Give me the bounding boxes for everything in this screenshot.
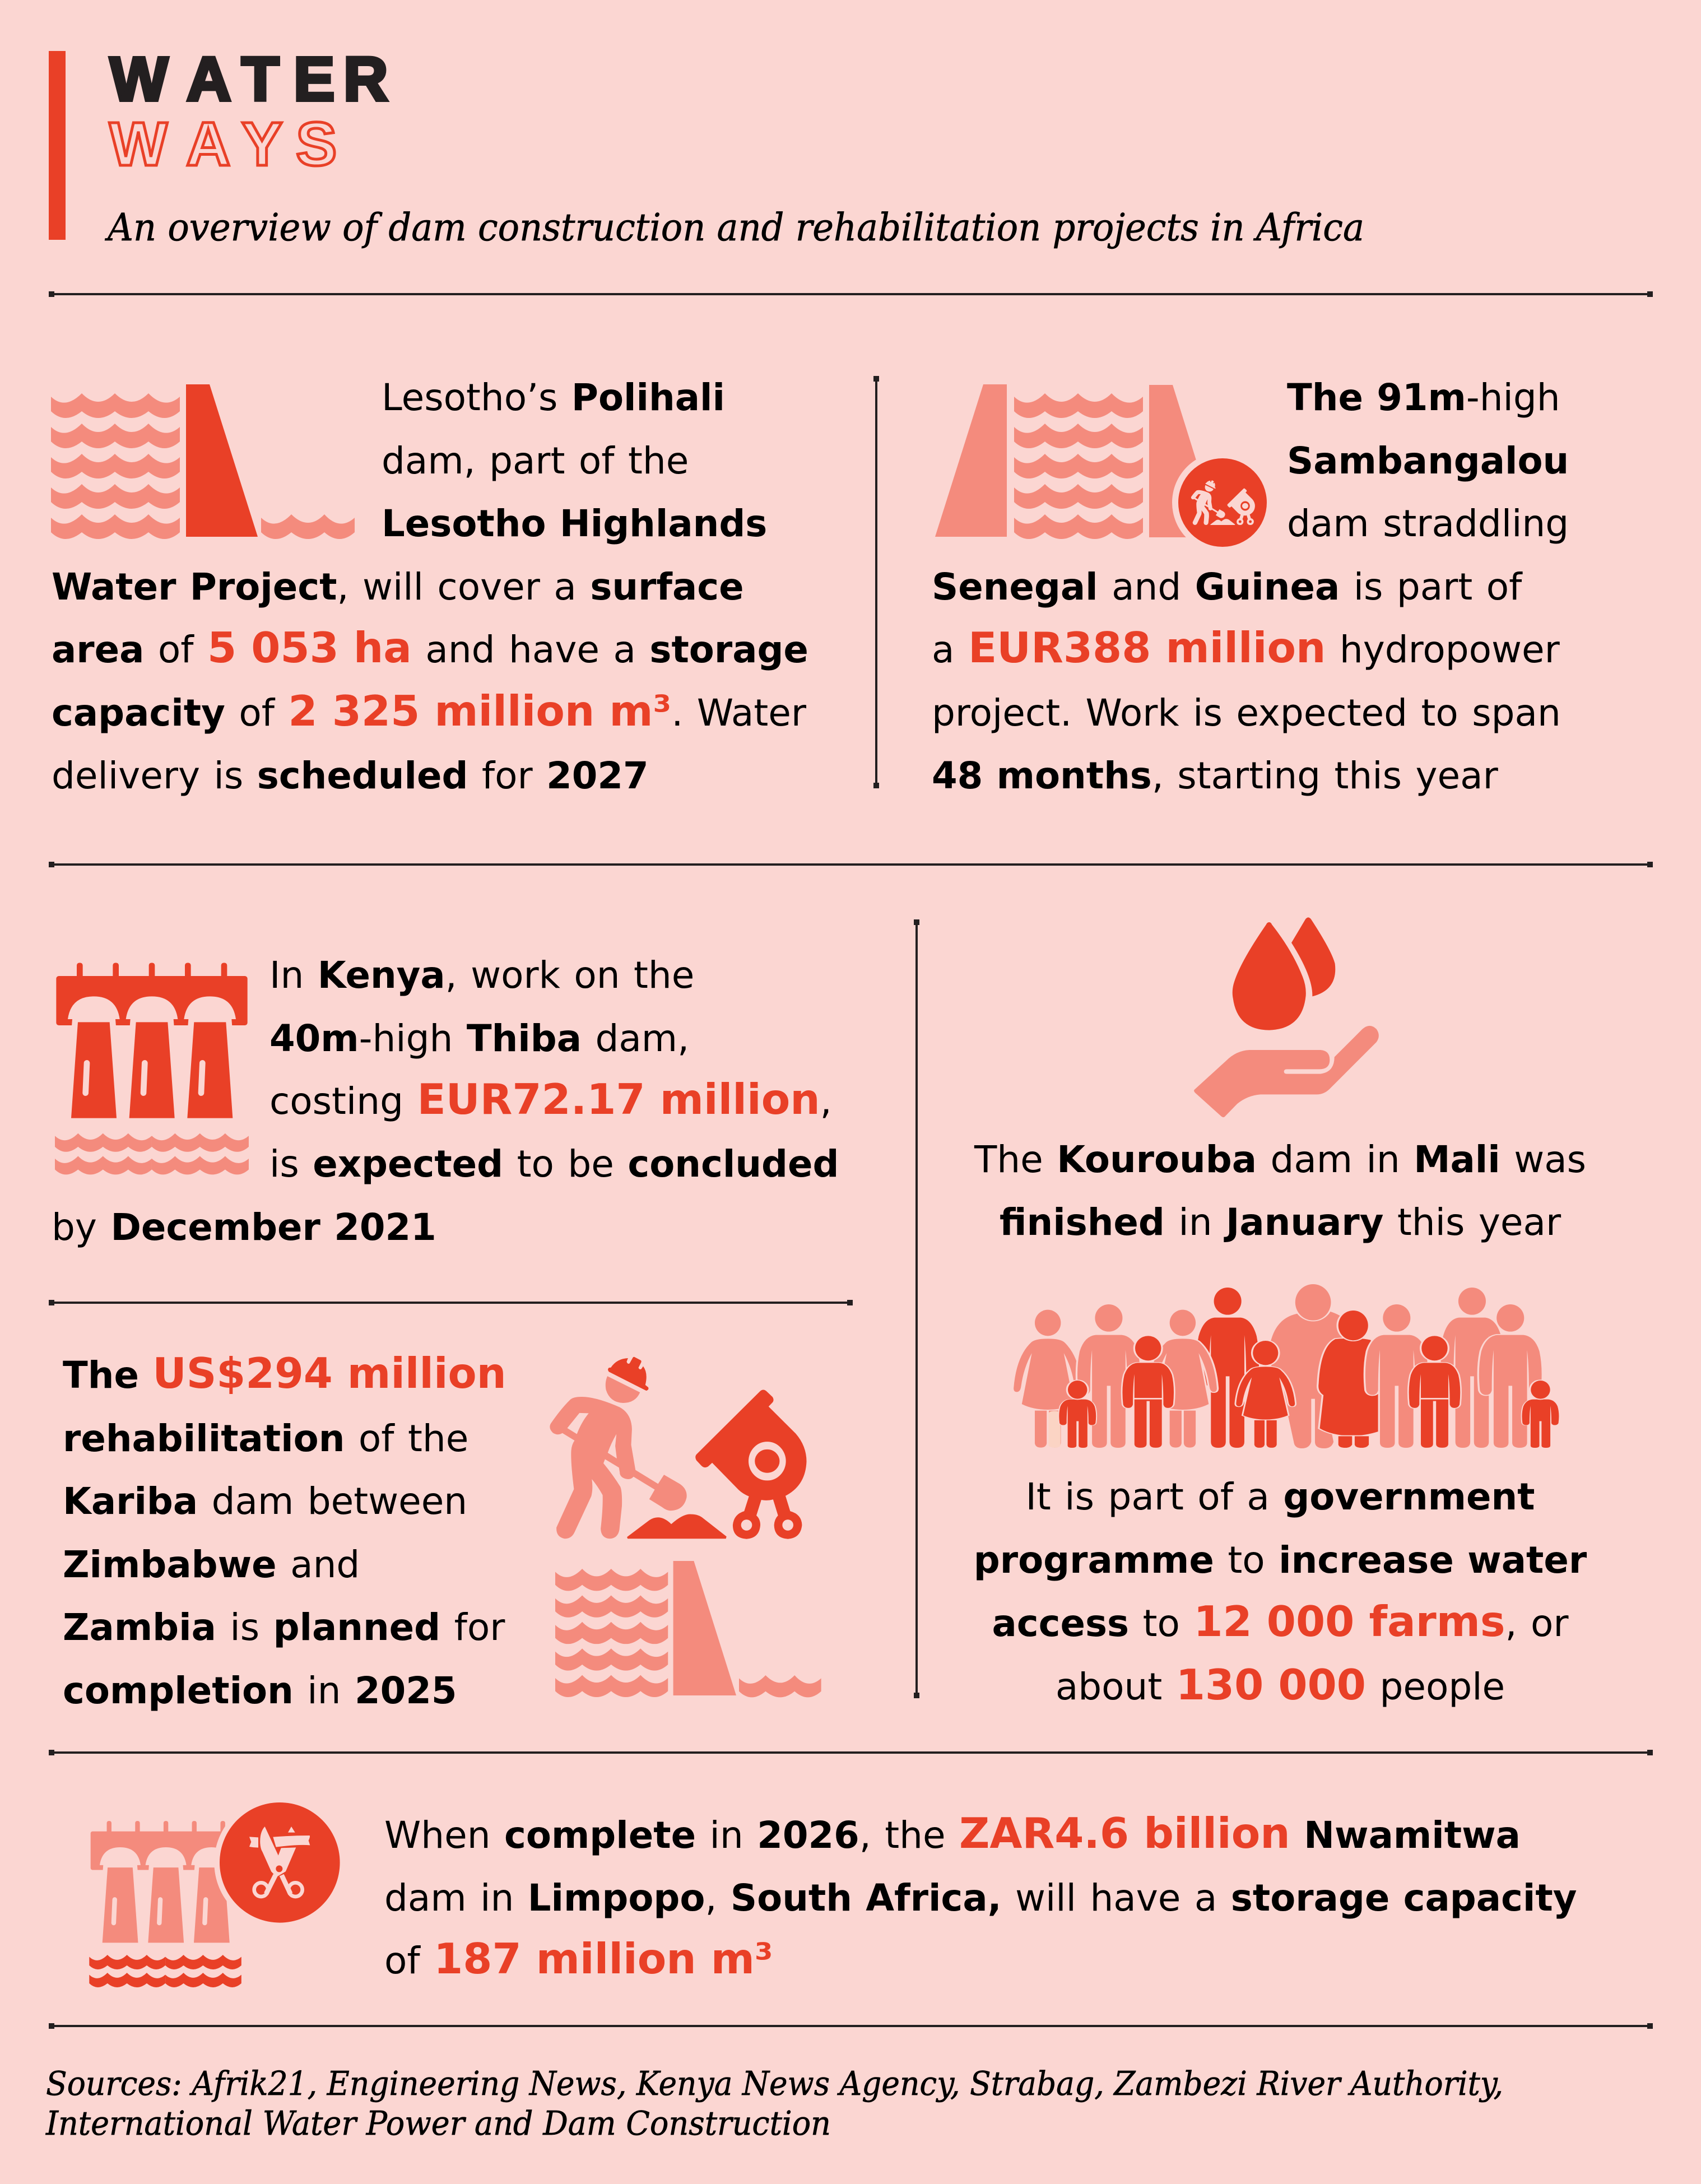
title: WAYS outline: WAYS <box>109 110 337 179</box>
title accent bar <box>49 51 66 240</box>
text: Kariba dam <box>63 1349 506 1712</box>
text: Thiba dam: costing EUR72.17 million, <box>269 1075 832 1124</box>
title: WATER: WATER <box>110 45 388 114</box>
text: Polihali dam: delivery is scheduled for 2027 <box>52 754 649 797</box>
text: Polihali dam: Water Project, will cover a surface <box>52 565 744 608</box>
text: Thiba dam: 40m-high Thiba dam, <box>269 1017 689 1060</box>
text: Polihali dam: Lesotho Highlands <box>382 503 767 545</box>
text: Polihali dam: area of 5 053 ha and have a storage <box>52 623 808 672</box>
text: Kourouba dam: finished in January this year <box>1000 1201 1561 1244</box>
text: Kariba dam: completion in 2025 <box>63 1669 457 1712</box>
text: Sambangalou dam: dam straddling <box>1287 502 1569 545</box>
sources: Sources: Afrik21, Engineering News, Kenya News Agency, Strabag, Zambezi River Authority, <box>46 2064 1503 2103</box>
text: Kariba dam: Kariba dam between <box>63 1480 467 1523</box>
icon: Thiba dam arches <box>55 963 249 1174</box>
icon: Nwamitwa dam with ribbon-cutting badge <box>89 1797 345 1987</box>
text: Kariba dam: rehabilitation of the <box>63 1417 468 1460</box>
text: Kariba dam: Zambia is planned for <box>63 1606 505 1649</box>
icon: scissors and ribbon <box>249 1827 310 1897</box>
text: Kariba dam: Zimbabwe and <box>63 1543 360 1586</box>
text: Kariba dam: The US$294 million <box>63 1349 506 1398</box>
icon: Polihali dam and water <box>51 384 355 539</box>
text: Kourouba dam: The Kourouba dam in Mali was <box>974 1138 1586 1181</box>
text: Sambangalou dam: a EUR388 million hydropower <box>932 623 1560 672</box>
text: Sambangalou dam: Senegal and Guinea is part of <box>932 565 1523 608</box>
text: Nwamitwa dam <box>384 1809 1577 1983</box>
icon: worker and mixer small <box>1191 480 1255 525</box>
icon: Kariba dam and water <box>555 1561 821 1697</box>
text: Sambangalou dam: Sambangalou <box>1287 440 1569 482</box>
text: Polihali dam: capacity of 2 325 million m³. Water <box>52 686 807 736</box>
text: government programme: access to 12 000 farms, or <box>992 1597 1569 1646</box>
icon: water drops over hand <box>1194 917 1379 1117</box>
text: Sambangalou dam: project. Work is expected to span <box>932 691 1561 735</box>
sources <box>45 2064 1503 2143</box>
text: Nwamitwa dam: When complete in 2026, the ZAR4.6 billion Nwamitwa <box>384 1809 1521 1858</box>
icon: Sambangalou dam with construction badge <box>935 384 1273 554</box>
text: Sambangalou dam <box>932 376 1569 797</box>
text: government programme: It is part of a government <box>1025 1475 1535 1518</box>
icon: group of people <box>1014 1284 1559 1448</box>
text: Polihali dam <box>52 376 808 797</box>
text: government programme: about 130 000 people <box>1056 1660 1505 1709</box>
text: Thiba dam <box>52 954 839 1249</box>
sources: International Water Power and Dam Construction <box>45 2104 831 2143</box>
icon: worker with shovel and cement mixer <box>550 1357 807 1539</box>
text: Thiba dam: is expected to be concluded <box>269 1142 839 1186</box>
text: Thiba dam: by December 2021 <box>52 1206 436 1249</box>
title block <box>49 45 1364 249</box>
text: government programme: programme to increase water <box>974 1539 1587 1582</box>
text: Sambangalou dam: The 91m-high <box>1287 376 1560 419</box>
text: Polihali dam: Lesotho’s Polihali <box>382 376 725 419</box>
text: Kourouba dam <box>974 1138 1586 1244</box>
text: Nwamitwa dam: dam in Limpopo, South Africa, will have a storage capacity <box>384 1876 1577 1920</box>
text: government programme <box>974 1475 1587 1709</box>
text: Nwamitwa dam: of 187 million m³ <box>384 1934 773 1983</box>
text: Thiba dam: In Kenya, work on the <box>269 954 694 997</box>
subtitle: An overview of dam construction and rehabilitation projects in Africa <box>104 206 1364 249</box>
text: Polihali dam: dam, part of the <box>382 439 689 482</box>
text: Sambangalou dam: 48 months, starting this year <box>932 754 1499 797</box>
